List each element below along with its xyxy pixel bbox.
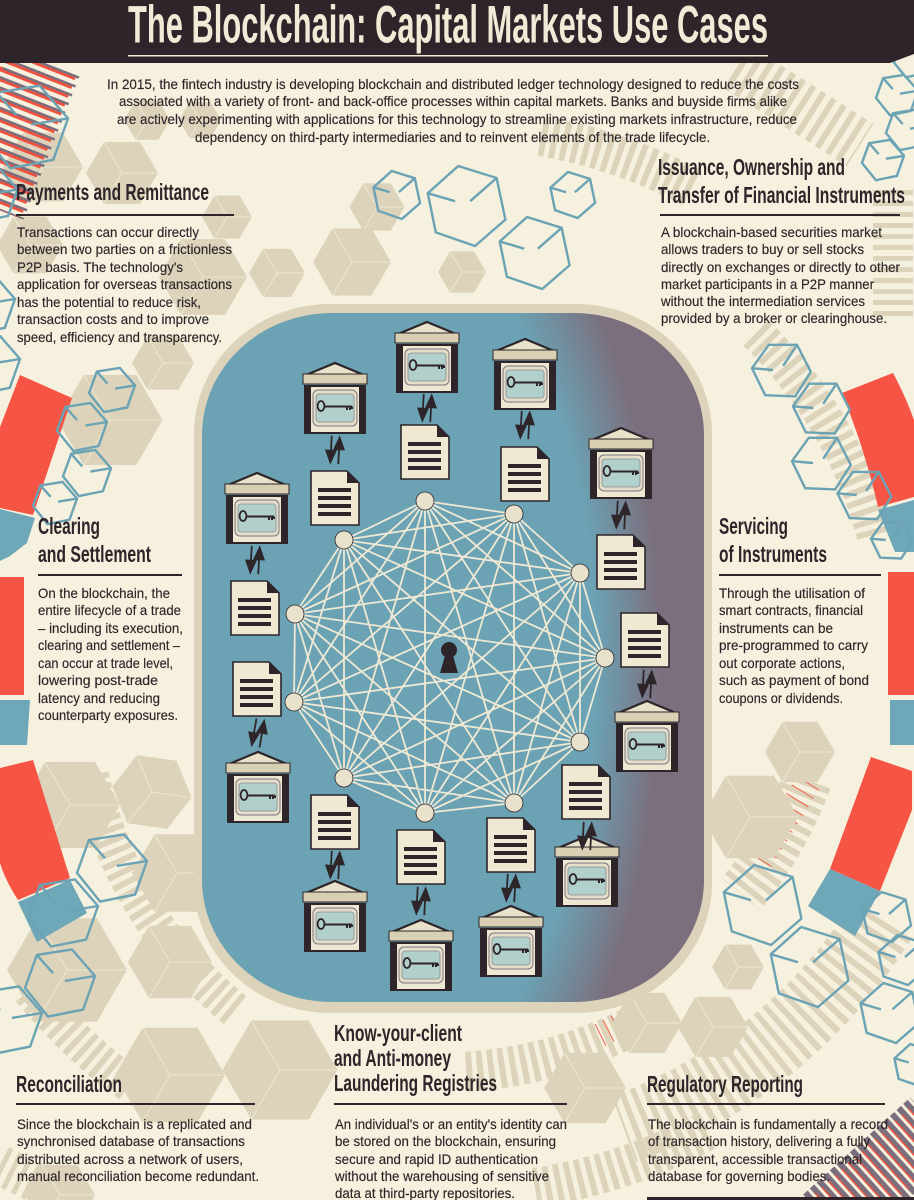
body text: between two parties on a frictionless [17,242,232,257]
body text: smart contracts, financial [719,603,863,618]
network nodes [285,492,614,822]
bottom-right red stripes [828,1125,914,1200]
panel: Clearing and Settlement [38,513,183,723]
body text: entire lifecycle of a trade [38,603,181,618]
panel: Servicing of Instruments [719,513,881,706]
body text [17,1117,259,1184]
arrows between banks and documents [244,392,658,917]
body text: without the warehousing of sensitive [334,1169,549,1184]
icons: banks [225,322,679,991]
body text: out corporate actions, [719,656,845,671]
intro text: dependency on third-party intermediaries and to reinvent elements of the trade lifecycle. [195,130,710,145]
body text: pre-programmed to carry [719,638,868,653]
body text: transaction costs and to improve [17,312,209,327]
body text: market participants in a P2P manner [661,277,874,292]
body text: distributed across a network of users, [17,1152,243,1167]
red and blue ring segments, left [0,375,87,942]
body text: – including its execution, [38,621,183,636]
body text: latency and reducing [38,691,160,706]
body text: manual reconciliation become redundant. [17,1169,259,1184]
body text: instruments can be [719,621,833,636]
body text: On the blockchain, the [38,586,170,601]
body text: P2P basis. The technology's [17,260,183,275]
panel: Regulatory Reporting [647,1071,914,1200]
header banner [0,0,914,63]
heading: Laundering Registries [334,1070,497,1096]
panel: Know-your-client and Anti-money Laundering Registries [334,1020,567,1200]
body text: database for governing bodies. [648,1169,830,1184]
central panel [202,313,704,1002]
heading: Payments and Remittance [16,179,209,205]
body text [38,586,183,723]
central panel outer ring [194,304,712,1013]
panel: Payments and Remittance [16,179,234,345]
panel: Reconciliation [16,1071,259,1184]
heading: Regulatory Reporting [647,1071,803,1097]
body text: lowering post-trade [38,673,158,688]
body text [719,586,869,706]
body text: has the potential to reduce risk, [17,295,201,310]
body text [648,1117,888,1184]
heading: of Instruments [719,541,827,567]
body text: An individual's or an entity's identity can [335,1117,567,1132]
heading: Clearing [38,513,100,539]
body text: provided by a broker or clearinghouse. [661,311,887,326]
icons: documents [231,425,669,884]
intro text: In 2015, the fintech industry is developing blockchain and distributed ledger technology designed to reduce the costs [107,77,799,92]
body text: without the intermediation services [660,294,865,309]
network graph [285,492,614,822]
body text: Since the blockchain is a replicated and [17,1117,252,1132]
body text: clearing and settlement – [38,638,180,653]
body text: allows traders to buy or sell stocks [661,242,864,257]
body text: A blockchain-based securities market [661,225,882,240]
body text: directly on exchanges or directly to other [661,260,900,275]
body text: transparent, accessible transactional [648,1152,862,1167]
body text: application for overseas transactions [17,277,232,292]
heading: and Anti-money [334,1045,451,1071]
body text: coupons or dividends. [719,691,843,706]
panel: Issuance, Ownership and Transfer [658,154,905,326]
network lines [294,501,605,813]
body text: such as payment of bond [719,673,869,688]
body text: The blockchain is fundamentally a record [648,1117,888,1132]
body text [17,225,232,345]
body text: synchronised database of transactions [17,1134,245,1149]
intro text: are actively experimenting with applications for this technology to streamline existing markets infrastructure, reduce [117,112,797,127]
heading: Servicing [719,513,788,539]
body text: be stored on the blockchain, ensuring [335,1134,556,1149]
body text: speed, efficiency and transparency. [17,330,222,345]
body text: Transactions can occur directly [17,225,199,240]
body text: secure and rapid ID authentication [335,1152,538,1167]
body text: of transaction history, delivering a fully [648,1134,870,1149]
heading: and Settlement [38,541,151,567]
red and blue ring segments, right [808,373,914,936]
body text: counterparty exposures. [38,708,178,723]
body text [334,1117,567,1200]
intro text [107,77,799,145]
top-left red stripes [0,62,45,206]
body text: can occur at trade level, [38,656,173,671]
body text: Through the utilisation of [719,586,865,601]
body text [660,225,900,326]
heading: Know-your-client [334,1020,462,1046]
icon: keyhole [440,642,458,673]
heading: Reconciliation [16,1071,122,1097]
intro text: associated with a variety of front- and back-office processes within capital markets. Banks and buyside firms alike [119,94,787,109]
